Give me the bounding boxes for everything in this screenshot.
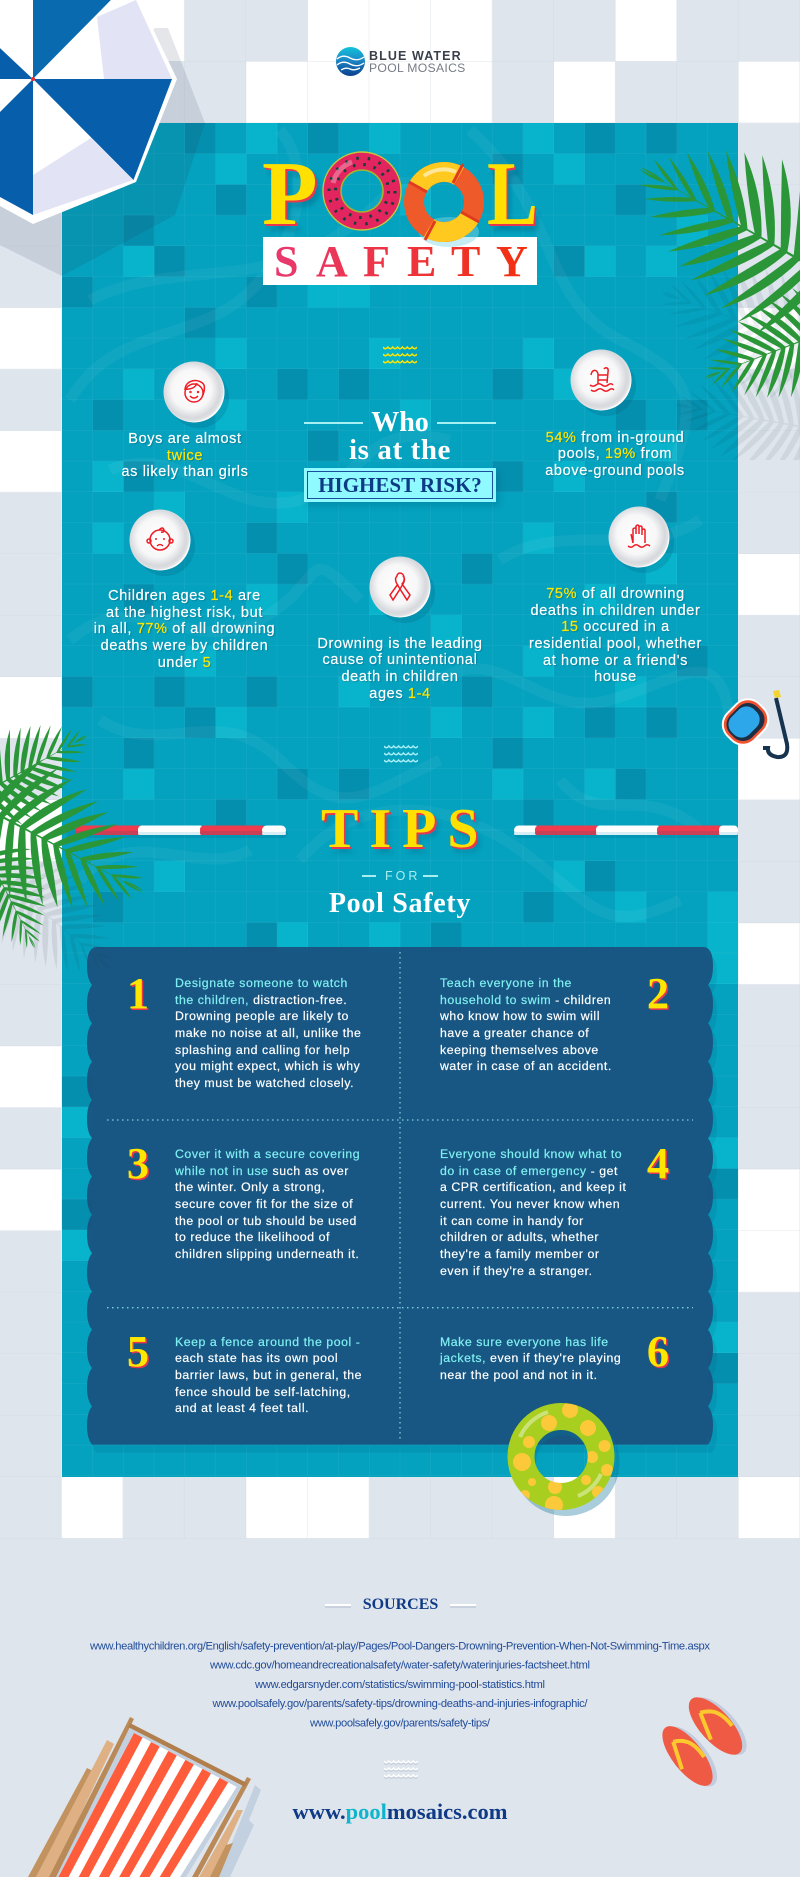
- tip 5: fence should be self-latching,: [175, 1385, 351, 1399]
- logo wordmark: [369, 48, 466, 75]
- icon: deck chair: [20, 1712, 265, 1877]
- tip 4: [440, 1147, 626, 1278]
- rule left: [362, 875, 376, 876]
- icon: flip flops: [650, 1685, 755, 1797]
- sources label: SOURCES: [363, 1596, 438, 1613]
- icon: snorkel: [763, 690, 790, 760]
- stat: boys: [121, 431, 249, 480]
- tip 1: they must be watched closely.: [175, 1076, 354, 1090]
- tip 3: secure cover fit for the size of: [175, 1197, 353, 1211]
- tip 1: splashing and calling for help: [175, 1043, 350, 1057]
- tip 6: near the pool and not in it.: [440, 1368, 598, 1382]
- source links: www.poolsafely.gov/parents/safety-tips/drowning-deaths-and-injuries-infographic/: [212, 1698, 588, 1710]
- icon: green polka-dot swim ring: [508, 1403, 620, 1516]
- left rule: [304, 422, 363, 424]
- number 2: 2: [647, 968, 669, 1018]
- tip 2: keeping themselves above: [440, 1043, 599, 1057]
- tip 3: children slipping underneath it.: [175, 1247, 359, 1261]
- icon: yellow waves: [383, 346, 417, 364]
- stat: residential pools: deaths in children under: [531, 603, 700, 619]
- heading: who is at the highest risk: [304, 407, 500, 507]
- number 5: 5: [127, 1326, 149, 1376]
- title letter L: L: [487, 142, 538, 244]
- stat: in-ground pools: pools, 19% from: [558, 446, 672, 462]
- stat: leading cause: cause of unintentional: [323, 652, 477, 668]
- tip 5: Keep a fence around the pool -: [175, 1335, 360, 1349]
- tip 6: jackets, even if they're playing: [440, 1351, 621, 1365]
- icon: beach umbrella: [0, 0, 177, 224]
- source links: www.healthychildren.org/English/safety-prevention/at-play/Pages/Pool-Dangers-Drowning-Prevention-When-Not-Swimming-Time.aspx: [89, 1640, 710, 1652]
- tip 5: barrier laws, but in general, the: [175, 1368, 362, 1382]
- stat: boys: Boys are almost: [128, 431, 242, 447]
- source links: www.poolsafely.gov/parents/safety-tips/: [309, 1717, 491, 1729]
- stat: in-ground pools: [545, 430, 685, 480]
- icon: palm fronds right: [639, 150, 800, 460]
- stat: residential pools: house: [594, 669, 637, 685]
- stat: leading cause: ages 1-4: [369, 686, 431, 702]
- tip 2: water in case of an accident.: [440, 1059, 612, 1073]
- umbrella shadow: [0, 28, 205, 276]
- stat: boys: as likely than girls: [121, 464, 249, 480]
- bead icon: boy: [164, 362, 229, 428]
- stat: children ages 1-4: [94, 588, 275, 671]
- icon: watermelon donut float: [322, 151, 402, 231]
- stat: leading cause: death in children: [341, 669, 459, 685]
- tip 2: Teach everyone in the: [440, 976, 572, 990]
- stat: residential pools: [529, 586, 702, 685]
- number 1: 1: [127, 968, 149, 1018]
- icon: palm fronds left: [0, 725, 143, 971]
- heading: pool safety: Pool Safety: [329, 888, 471, 918]
- tip 2: have a greater chance of: [440, 1026, 589, 1040]
- right rule: [437, 422, 496, 424]
- icon: swim mask: [722, 698, 770, 745]
- is at the: is at the: [349, 434, 451, 466]
- icon: white waves: [384, 1760, 418, 1779]
- icon: orange and yellow lifebuoy: [404, 162, 484, 247]
- tip 4: it can come in handy for: [440, 1214, 584, 1228]
- stat: leading cause: [317, 636, 483, 702]
- for label: FOR: [385, 869, 420, 883]
- bead icon: ribbon: [370, 556, 435, 623]
- website url: www.poolmosaics.com: [292, 1798, 508, 1824]
- tip 4: current. You never know when: [440, 1197, 620, 1211]
- stat: residential pools: residential pool, whether: [529, 636, 702, 652]
- tip 6: [440, 1335, 621, 1382]
- rule right: [423, 875, 438, 876]
- stat: leading cause: Drowning is the leading: [317, 636, 483, 652]
- tip 1: you might expect, which is why: [175, 1059, 360, 1073]
- tip 4: even if they're a stranger.: [440, 1264, 593, 1278]
- lane rope right: [514, 826, 738, 838]
- stat: residential pools: at home or a friend's: [543, 653, 688, 669]
- source links: www.edgarsnyder.com/statistics/swimming-pool-statistics.html: [254, 1679, 545, 1691]
- tip 5: and at least 4 feet tall.: [175, 1401, 309, 1415]
- rule left: [325, 1604, 351, 1606]
- tip 1: make no noise at all, unlike the: [175, 1026, 361, 1040]
- source links: www.cdc.gov/homeandrecreationalsafety/water-safety/waterinjuries-factsheet.html: [209, 1660, 590, 1672]
- tip 6: Make sure everyone has life: [440, 1335, 609, 1349]
- logo: [336, 47, 466, 76]
- panel: tips: [87, 947, 717, 1452]
- rule right: [450, 1604, 476, 1606]
- logo icon: [336, 47, 365, 76]
- source links: [89, 1640, 710, 1729]
- tip 1: the children, distraction-free.: [175, 993, 347, 1007]
- highest risk box: HIGHEST RISK?: [318, 473, 482, 497]
- who: Who: [371, 407, 429, 438]
- number 4: 4: [647, 1138, 669, 1188]
- logo wordmark: POOL MOSAICS: [369, 61, 466, 75]
- stat: in-ground pools: 54% from in-ground: [546, 430, 684, 446]
- tip 1: Designate someone to watch: [175, 976, 348, 990]
- highest risk box: [304, 468, 496, 502]
- lane rope left: [66, 826, 288, 838]
- tip 4: they're a family member or: [440, 1247, 599, 1261]
- tip 2: who know how to swim will: [440, 1009, 600, 1023]
- tip 3: [174, 1147, 360, 1261]
- stat: children ages 1-4: at the highest risk, but: [106, 605, 263, 621]
- tip 1: Drowning people are likely to: [175, 1009, 349, 1023]
- stat: children ages 1-4: under 5: [158, 655, 211, 671]
- pool water with mosaic tiles: [62, 123, 738, 1477]
- bead icon: raised hand: [608, 506, 674, 573]
- stat: children ages 1-4: in all, 77% of all drowning: [94, 621, 275, 637]
- title letter P: P: [262, 142, 318, 244]
- stat: children ages 1-4: deaths were by children: [101, 638, 268, 654]
- heading: tips: TIPS: [321, 798, 490, 860]
- tip 4: children or adults, whether: [440, 1230, 599, 1244]
- tip 4: a CPR certification, and keep it: [440, 1180, 626, 1194]
- icon: pale waves: [384, 744, 418, 762]
- stat: in-ground pools: above-ground pools: [545, 463, 685, 479]
- stat: children ages 1-4: Children ages 1-4 are: [108, 588, 261, 604]
- logo wordmark: BLUE WATER: [369, 48, 462, 62]
- stat: residential pools: 75% of all drowning: [546, 586, 685, 602]
- tip 3: while not in use such as over: [175, 1164, 349, 1178]
- safety plaque: SAFETY: [274, 237, 528, 285]
- tip 3: the winter. Only a strong,: [175, 1180, 325, 1194]
- tip 4: do in case of emergency - get: [440, 1164, 618, 1178]
- number 3: 3: [127, 1138, 149, 1188]
- stat: boys: twice: [167, 448, 203, 464]
- tip 5: each state has its own pool: [175, 1351, 338, 1365]
- number 6: 6: [647, 1326, 669, 1376]
- tip 5: [175, 1335, 362, 1415]
- tip 3: to reduce the likelihood of: [175, 1230, 330, 1244]
- tip 2: household to swim - children: [440, 993, 611, 1007]
- stat: residential pools: 15 occured in a: [561, 619, 670, 635]
- tip 2: [440, 976, 612, 1073]
- bead icon: swimmer: [570, 350, 636, 416]
- tip 4: Everyone should know what to: [440, 1147, 622, 1161]
- tip 3: Cover it with a secure covering: [175, 1147, 360, 1161]
- tip 3: the pool or tub should be used: [175, 1214, 357, 1228]
- tip 1: [174, 976, 361, 1090]
- bead icon: baby: [130, 510, 195, 576]
